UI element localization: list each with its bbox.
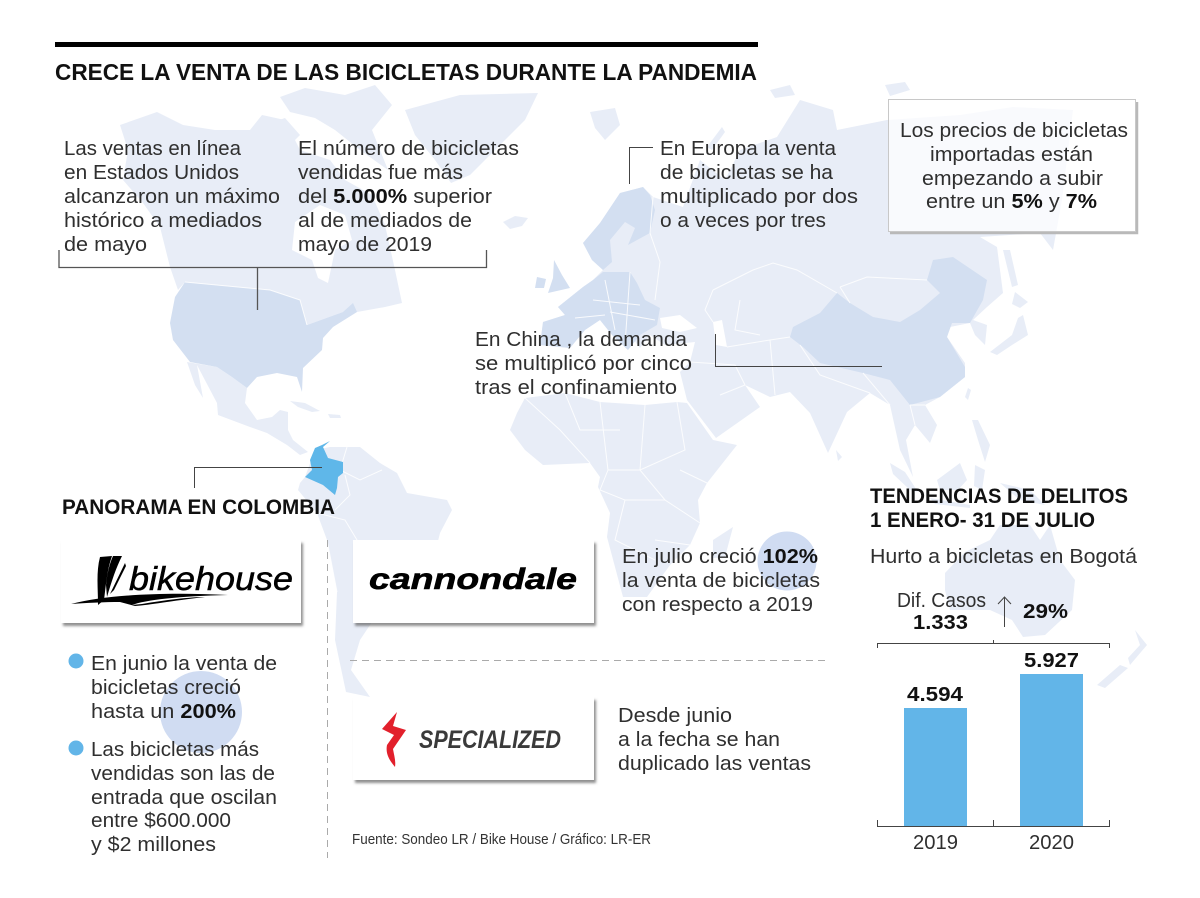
landmass: Caribbean [290,401,341,418]
title: CRECE LA VENTA DE LAS BICICLETAS DURANTE LA PANDEMIA [55,59,757,85]
text: Europe: En Europa la venta [660,138,837,160]
bullet: entry-level bikes: y $2 millones [91,834,216,856]
panel: cannondale logo [353,540,594,623]
text: specialized: Desde junio [618,705,732,727]
panel: bike house logo [61,540,301,623]
highlighted: United States [170,282,357,392]
landmass: Africa [510,393,737,597]
bullet: June sales: hasta un 200% [91,701,236,723]
icon: bike house feathers [98,556,126,605]
landmass: Southeast Asia islands [890,420,1045,508]
bracket to United States [59,250,486,310]
landmass: Eurasia [540,100,1073,477]
text: cannondale: con respecto a 2019 [622,594,813,616]
label 2020: 2020 [1029,832,1074,854]
bullet: June sales: En junio la venta de [91,653,277,675]
landmass: Greenland [405,93,538,183]
text: US online sales: de mayo [64,234,147,256]
text: Europe: de bicicletas se ha [660,162,834,184]
text: specialized: a la fecha se han [618,729,780,751]
label 2019: 2019 [913,832,958,854]
difference label: 1.333 [913,612,968,634]
icon: up arrow [998,597,1011,627]
text: China: tras el confinamiento [475,377,677,399]
bar 2019 [904,708,967,826]
world map [120,82,1147,697]
subheading: bike theft: Hurto a bicicletas en Bogotá [870,546,1138,568]
icon: specialized S [382,712,406,767]
decorative circle left [160,671,242,753]
landmass: Arctic islands [265,85,392,170]
landmass: Black Sea and Caspian [660,315,727,347]
panel: specialized logo [353,697,594,780]
difference label: Dif. Casos [897,590,986,612]
highlighted: China [790,257,987,405]
text: cannondale: la venta de bicicletas [622,570,820,592]
bullet: entry-level bikes: Las bicicletas más [91,739,259,761]
landmass: Sakhalin [1003,250,1018,287]
highlighted: Scandinavia [583,187,655,270]
bracket to Colombia [194,468,322,488]
bullet: entry-level bikes: entrada que oscilan [91,787,277,809]
panel: import prices: entre un 5% y 7% [926,191,1097,213]
text: US online sales: alcanzaron un máximo [64,186,280,208]
decorative circle right [758,532,816,590]
value 2020: 5.927 [1024,650,1079,672]
text: US online sales: Las ventas en línea [64,138,242,160]
panel: bike house logo: bikehouse [129,560,293,597]
text: Europe [660,138,858,232]
landmass: New Zealand [1097,630,1147,688]
text: Europe: multiplicado por dos [660,186,858,208]
bullet: entry-level bikes: entre $600.000 [91,810,231,832]
value 2019: 4.594 [907,684,964,706]
landmass: Svalbard and Novaya Zemlya [590,82,910,150]
panel: import prices: Los precios de bicicletas [900,120,1128,142]
bar chart [878,590,1110,854]
highlighted: Europe [540,272,660,350]
text: 5000 percent: del 5.000% superior [298,186,492,208]
panel: import prices: importadas están [930,144,1093,166]
text: specialized: duplicado las ventas [618,753,811,775]
landmass: Mexico and Central America [187,362,308,455]
landmass: Hudson Bay [292,205,352,283]
bracket to China [716,334,882,366]
text: 5000 percent: El número de bicicletas [298,138,519,160]
highlighted: British Isles [535,260,570,293]
source: Fuente: Sondeo LR / Bike House / Gráfico: LR-ER [352,831,651,848]
text: 5000 percent: al de mediados de [298,210,472,232]
text: 5000 percent [298,138,519,256]
panel: import prices: empezando a subir [922,168,1103,190]
text: China: En China , la demanda [475,329,688,351]
bar 2020 [1020,674,1083,826]
text: cannondale: En julio creció 102% [622,546,818,568]
text: China [475,329,692,399]
landmass: South America [298,447,452,697]
heading: crime trends: 1 ENERO- 31 DE JULIO [870,509,1095,532]
text: 5000 percent: mayo de 2019 [298,234,432,256]
bullet: entry-level bikes [68,739,277,856]
text: US online sales: histórico a mediados [64,210,262,232]
heading: Colombia: PANORAMA EN COLOMBIA [62,496,335,519]
icon: bike house swoosh [71,594,228,606]
text: US online sales [64,138,280,256]
panel: cannondale logo: cannondale [369,563,577,596]
heading: crime trends: TENDENCIAS DE DELITOS [870,485,1128,508]
landmass: Taiwan [965,388,971,400]
bracket to Europe [630,148,653,184]
difference label [897,590,986,634]
highlighted: Colombia [305,441,343,495]
panel: specialized logo: SPECIALIZED [419,726,561,754]
panel: import prices [888,100,1137,233]
heading: crime trends [870,485,1128,532]
landmass: North America [120,112,402,325]
title rule [55,42,758,47]
bullet: June sales [68,653,277,723]
text: US online sales: en Estados Unidos [64,162,239,184]
text: Europe: o a veces por tres [660,210,826,232]
text: specialized [618,705,811,775]
text: cannondale [622,546,820,616]
text: China: se multiplicó por cinco [475,353,692,375]
bullet: June sales: bicicletas creció [91,677,241,699]
country borders [185,197,927,592]
text: 5000 percent: vendidas fue más [298,162,463,184]
landmass: Australia [945,525,1075,637]
bullet: entry-level bikes: vendidas son las de [91,763,275,785]
landmass: Sri Lanka [836,450,842,461]
landmass: Iceland [503,216,528,229]
increase percent: 29% [1023,601,1068,623]
landmass: Japan [990,292,1028,355]
landmass: Madagascar [713,527,733,558]
